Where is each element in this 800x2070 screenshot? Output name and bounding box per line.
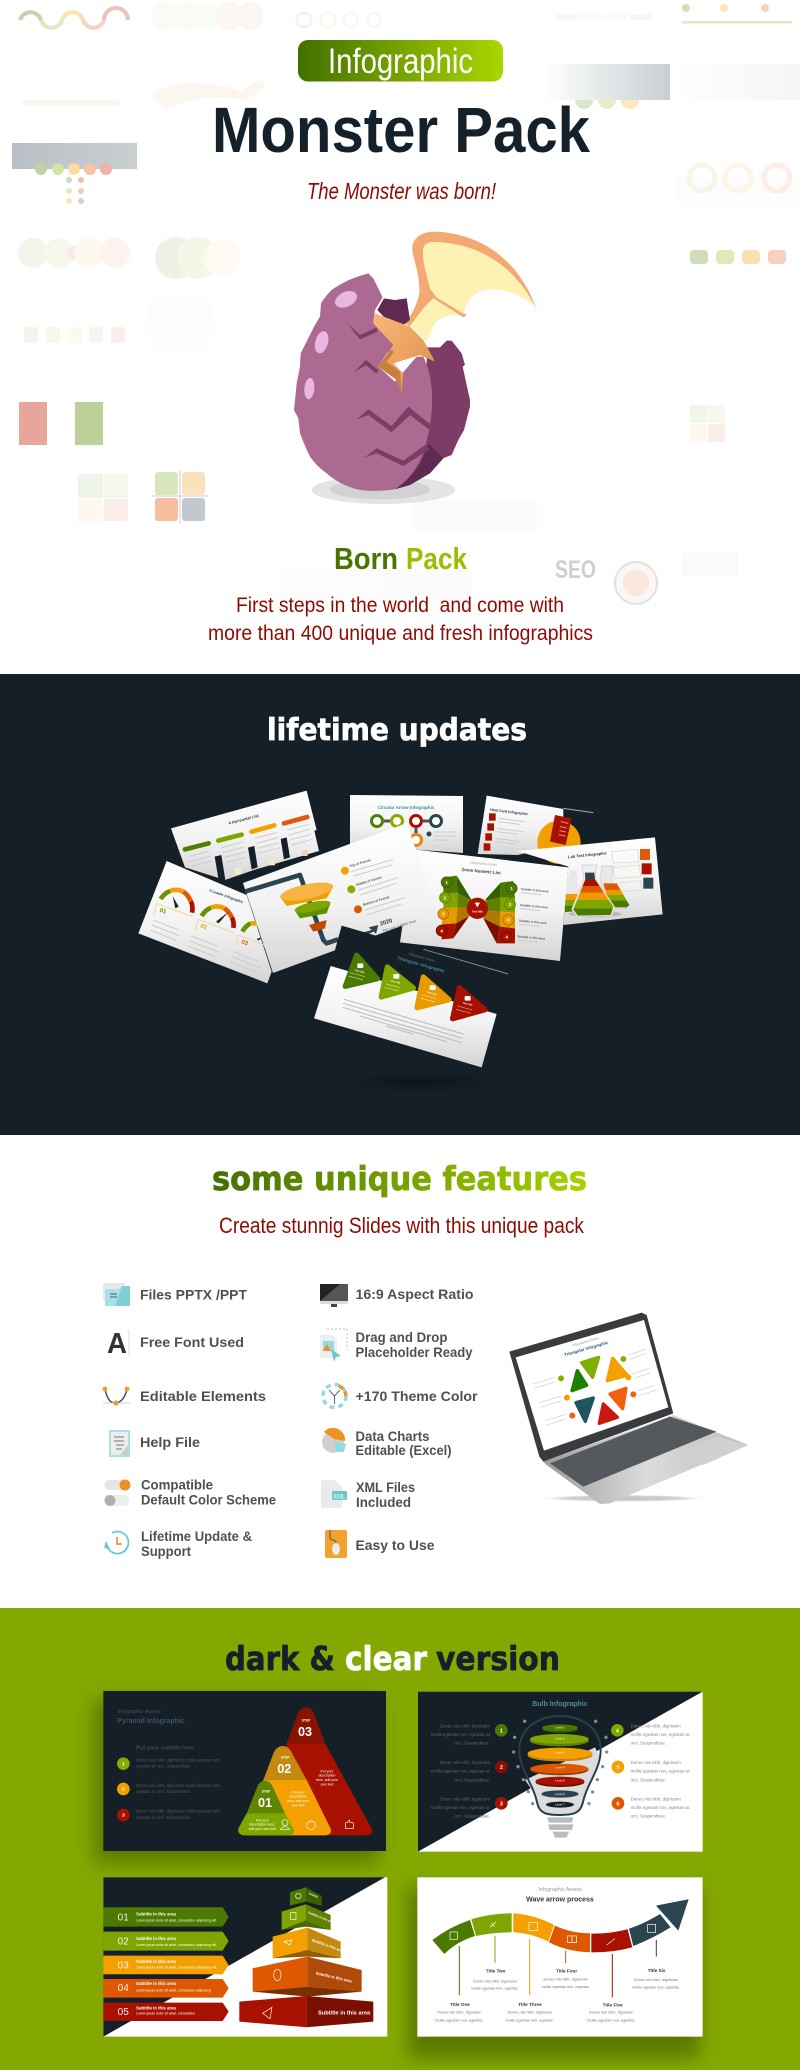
slide: Subtitle arrows pyramid: Subtitle in this area <box>136 1959 177 1964</box>
slide: Wave arrow process: Donec nisi nibh, dignissim <box>634 1978 678 1982</box>
feature: Lifetime Update and Support <box>104 1528 252 1559</box>
slide: Bulb Infographic: 5 <box>616 1765 619 1771</box>
slide: Pyramid Infographic dark: own text <box>291 1803 304 1807</box>
slide: Subtitle arrows pyramid: 02 <box>118 1937 129 1948</box>
slide: Zoom Numeric List: 2 <box>444 895 447 900</box>
slide shadows <box>94 1700 700 2058</box>
slide: Triangular Infographic: Your title <box>390 980 401 985</box>
slide: Heat Card Infographic <box>478 796 593 864</box>
illustration: hatching dragon egg <box>294 232 538 504</box>
feature: Data Charts Editable (Excel): Editable (Excel) <box>356 1442 452 1458</box>
feature: Compatible Default Color Scheme: Default Color Scheme <box>141 1492 276 1508</box>
slide: Pyramid Infographic dark: Infographic Assets <box>117 1709 161 1715</box>
slide: Triangular Infographic: Your title <box>354 969 365 974</box>
slide: Zoom Numeric List: Text title <box>472 909 483 913</box>
feature: XML Files Included: XML Files <box>356 1479 415 1495</box>
slide: Bulb Infographic: Donec nisi nibh, dignissim <box>631 1760 681 1765</box>
slide: Wave arrow process: mollis egestas non, egestas. <box>435 2018 483 2022</box>
slide: Pyramid Infographic dark: Donec nisi nibh, dignissim mollis egestas non, <box>136 1783 221 1788</box>
slide: Zoom Numeric List: 1 <box>445 880 448 885</box>
slide: Zoom Numeric List: Subtitle in this area <box>520 903 548 909</box>
feature: Files PPTX /PPT: Files PPTX /PPT <box>140 1286 247 1302</box>
feature: +170 Theme Color <box>323 1384 478 1408</box>
slide: Lab Test Infographic <box>517 837 663 925</box>
heading: Born Pack: Pack <box>406 541 468 576</box>
slide: Pyramid Infographic dark: 1 <box>122 1761 125 1767</box>
slide: Gauge Infographic <box>138 861 272 983</box>
slide: Pyramid Infographic dark: Put your subtitle here <box>136 1745 194 1751</box>
slide: Bulb Infographic: orci. Suspendisse. <box>455 1777 490 1782</box>
heading: dark & clear version <box>225 1639 560 1678</box>
slide: Wave arrow process: Donec nisi nibh, dignissim <box>437 2011 481 2015</box>
slide: Triangular Infographic: Infographic Assets <box>408 952 436 963</box>
slide: Bulb Infographic: orci. Suspendisse. <box>455 1814 490 1819</box>
feature: Drag and Drop Placeholder Ready <box>320 1329 473 1362</box>
slide: Funnel: Put your subtitle here <box>382 919 417 933</box>
slide: Triangular Infographic <box>314 926 508 1067</box>
feature: Free Font Used: A <box>107 1328 127 1360</box>
faint background slide thumbnails: SEO <box>555 556 596 584</box>
slide: Subtitle arrows pyramid: 05 <box>118 2007 129 2018</box>
slide: Zoom Numeric List: 3 <box>442 912 445 917</box>
slide: Subtitle arrows pyramid: Subtitle in this area <box>308 1911 335 1925</box>
feature: Drag and Drop Placeholder Ready: Placeholder Ready <box>356 1344 473 1360</box>
slide: Bulb Infographic: 4 <box>616 1728 619 1734</box>
slide: Pyramid Infographic dark: add your own text <box>249 1827 276 1831</box>
slide: Lab Test Infographic: Lab Test Infographic <box>568 850 608 859</box>
feature: Files PPTX /PPT <box>103 1283 247 1306</box>
heading: Born Pack <box>334 541 468 576</box>
description text: more than 400 unique and fresh infographics <box>208 622 593 645</box>
slide: Bulb Infographic: Level 1 <box>555 1726 565 1730</box>
slide: Pyramid Infographic dark: STEP <box>281 1756 290 1760</box>
slide: Zoom Numeric List: Subtitle in this area <box>519 919 547 925</box>
slide: Subtitle arrows pyramid <box>103 1877 387 2037</box>
feature: Data Charts Editable (Excel): Data Charts <box>356 1428 430 1444</box>
slide: Zoom Numeric List: 1 <box>510 886 513 891</box>
slide: Funnel <box>243 823 437 973</box>
slide: Bulb Infographic: Donec nisi nibh, dignissim <box>631 1723 681 1728</box>
slide: Wave arrow process: Title One <box>450 2002 470 2007</box>
slide: Wave arrow process: Donec nisi nibh, dignissim <box>589 2011 633 2015</box>
slide: Wave arrow process: mollis egestas non, egestas. <box>471 1987 519 1991</box>
slide: Bulb Infographic: mollis egestas non, egestas ac <box>631 1732 691 1737</box>
slide: Pyramid Infographic dark: STEP <box>302 1719 311 1723</box>
slide: Wave arrow process: Donec nisi nibh, dignissim <box>544 1977 588 1981</box>
slide: Bulb Infographic: 2 <box>500 1765 503 1771</box>
slide: Subtitle arrows pyramid: Subtitle in this area <box>136 1936 177 1941</box>
tagline: The Monster was born! <box>307 178 496 204</box>
slide: Subtitle arrows pyramid: Subtitle in this area <box>136 1912 177 1917</box>
description text <box>208 594 593 645</box>
heading: dark & clear version: version <box>436 1639 560 1678</box>
slide: Pyramid Infographic dark: 3 <box>122 1813 125 1819</box>
slide: Bulb Infographic: Level 2 <box>555 1736 565 1740</box>
slide: Pyramid Infographic dark: Donec nisi nibh, dignissim mollis egestas non, <box>136 1757 221 1762</box>
feature: Easy to Use <box>325 1530 435 1558</box>
slide: Wave arrow process: mollis egestas non, egestas. <box>505 2018 554 2022</box>
slide: Bulb Infographic: mollis egestas non, egestas ac <box>431 1805 491 1810</box>
slide: Pyramid Infographic dark: description here, <box>249 1823 275 1827</box>
slide: Pyramid Infographic dark: Put your <box>320 1769 334 1773</box>
slide: Subtitle arrows pyramid: Lorem ipsum dolor sit amet, consectetur adipiscing <box>136 1988 211 1992</box>
slide: 4 Horizontal List: 4 Horizontal List <box>228 813 260 826</box>
feature: 16:9 Aspect Ratio <box>320 1284 474 1307</box>
feature: XML Files Included: XML <box>333 1494 346 1500</box>
slide: Subtitle arrows pyramid: 03 <box>118 1960 129 1971</box>
slide: Subtitle arrows pyramid: Subtitle <box>308 1891 319 1899</box>
slide: Bulb Infographic: Donec nisi nibh, dignissim <box>440 1723 490 1728</box>
slide: Subtitle arrows pyramid: Lorem ipsum dolor sit amet, consectetur adipiscing elit. <box>136 1943 217 1947</box>
feature: Help File <box>109 1430 200 1457</box>
slide: Zoom Numeric List: 3 <box>507 918 510 923</box>
feature: Editable Elements: Editable Elements <box>140 1388 266 1404</box>
slide: Subtitle arrows pyramid: 01 <box>118 1912 129 1923</box>
slide: Wave arrow process: Title Three <box>518 2002 542 2007</box>
slide: Wave arrow process: Title Five <box>603 2002 623 2007</box>
slide: Bulb Infographic: mollis egestas non, egestas ac <box>431 1732 491 1737</box>
slide: Wave arrow process: mollis egestas non, egestas. <box>541 1985 590 1989</box>
slide: Bulb Infographic <box>418 1692 703 1852</box>
slide: Bulb Infographic: Level 5 <box>555 1779 565 1783</box>
slide: Bulb Infographic: Donec nisi nibh, dignissim <box>440 1760 490 1765</box>
slide: Pyramid Infographic dark: own text <box>320 1782 333 1786</box>
heading: some unique features: some unique features <box>212 1159 587 1198</box>
slide: Gauge Infographic: 3 Leader Infographic <box>209 888 244 904</box>
description text: First steps in the world and come with <box>236 594 564 617</box>
feature: Help File: Help File <box>140 1434 200 1450</box>
slide: Pyramid Infographic dark: egestas ac orci. Suspendisse. <box>136 1764 191 1769</box>
slide: Wave arrow process: mollis egestas non, egestas. <box>632 1986 680 1990</box>
illustration: laptop: Infographic Assets <box>572 1336 600 1347</box>
panel: dark and clear version <box>0 1608 800 2070</box>
slide: Pyramid Infographic dark: Donec nisi nibh, dignissim mollis egestas non, <box>136 1809 221 1814</box>
slide: Pyramid Infographic dark: 01 <box>258 1796 272 1810</box>
slide: Subtitle arrows pyramid: Subtitle in this area <box>315 1970 353 1984</box>
feature: Editable Elements <box>103 1387 266 1406</box>
slide: Gauge Infographic: 03 <box>240 940 249 947</box>
pill: Infographic: Infographic <box>328 42 473 81</box>
slide: Bulb Infographic: 3 <box>500 1801 503 1807</box>
slide: Zoom Numeric List: Zoom Numeric List <box>461 867 501 875</box>
slide: Pyramid Infographic dark: 03 <box>298 1725 312 1739</box>
feature: +170 Theme Color: +170 Theme Color <box>356 1388 478 1404</box>
slide: Bulb Infographic: mollis egestas non, egestas ac <box>431 1769 491 1774</box>
slide: Pyramid Infographic dark: egestas ac orci. Suspendisse. <box>136 1815 191 1820</box>
slide: Subtitle arrows pyramid: Subtitle in this area <box>136 1981 177 1986</box>
slide: Zoom Numeric List: Subtitle in this area <box>521 887 549 893</box>
feature: Easy to Use: Easy to Use <box>356 1537 435 1553</box>
slide: Funnel: Top of Funnel <box>349 858 371 868</box>
slide: Bulb Infographic: Level 7 <box>555 1803 565 1807</box>
slide: Triangular Infographic: Your title <box>462 1002 473 1007</box>
slide: Bulb Infographic: orci. Suspendisse. <box>455 1741 490 1746</box>
slide: Bulb Infographic: orci. Suspendisse. <box>631 1777 666 1782</box>
slide: Pyramid Infographic dark: description <box>319 1774 335 1778</box>
slide: Pyramid Infographic dark: 2 <box>122 1787 125 1793</box>
slide: Subtitle arrows pyramid: 04 <box>118 1983 129 1994</box>
slide: Circular Arrow Infographic: Circular Arrow Infographic <box>378 805 435 810</box>
feature: Lifetime Update and Support: Lifetime Update & <box>141 1528 252 1544</box>
slide: Zoom Numeric List: 4 <box>440 928 443 933</box>
faint background slide thumbnails <box>12 2 800 604</box>
slide: Funnel: Middle of Funnel <box>356 875 382 887</box>
feature: Compatible Default Color Scheme <box>104 1476 276 1508</box>
feature: Lifetime Update and Support: Support <box>141 1543 191 1559</box>
slide: Zoom Numeric List: 2 <box>509 902 512 907</box>
slide: Bulb Infographic: Level 6 <box>555 1792 565 1796</box>
slide: Pyramid Infographic dark: description <box>290 1795 306 1799</box>
slide: Pyramid Infographic dark: here, add your <box>287 1799 310 1803</box>
slide: Bulb Infographic: mollis egestas non, egestas ac <box>631 1805 691 1810</box>
slide: Bulb Infographic: Level 3 <box>555 1750 565 1754</box>
feature: XML Files Included <box>321 1479 415 1510</box>
slide: Bulb Infographic: mollis egestas non, egestas ac <box>631 1769 691 1774</box>
slide: Triangular Infographic: Your title <box>427 991 438 996</box>
slide: Subtitle arrows pyramid: Subtitle in this area <box>318 2011 371 2017</box>
slide: Zoom Numeric List: 4 <box>505 934 508 939</box>
slide: Bulb Infographic: 1 <box>500 1728 503 1734</box>
slide: Subtitle arrows pyramid: Subtitle in this area <box>311 1938 345 1954</box>
panel: hero <box>0 0 800 674</box>
slide: Wave arrow process: mollis egestas non, egestas. <box>587 2018 635 2022</box>
feature: XML Files Included: Included <box>356 1494 411 1510</box>
feature: Free Font Used: Free Font Used <box>140 1334 244 1350</box>
slide: Zoom Numeric List: Infographic Assets <box>470 860 497 867</box>
slide: Bulb Infographic: orci. Suspendisse. <box>631 1741 666 1746</box>
slide: Wave arrow process: Donec nisi nibh, dignissim <box>473 1979 517 1983</box>
heading: lifetime updates: lifetime updates <box>267 713 527 748</box>
panel: lifetime updates <box>0 674 800 1135</box>
slide: Pyramid Infographic dark: Put your <box>291 1790 305 1794</box>
slide: Funnel: Bottom of Funnel <box>362 895 390 907</box>
slide: Subtitle arrows pyramid: Subtitle in this area <box>136 2006 177 2011</box>
feature: Free Font Used <box>107 1328 244 1360</box>
slide: Wave arrow process: Title Four <box>556 1968 577 1973</box>
illustration: laptop <box>509 1313 748 1504</box>
slide: Triangular Infographic: Triangular Infographic <box>397 955 446 974</box>
slide: Pyramid Infographic dark: 02 <box>277 1762 291 1776</box>
slide: Funnel: 2020 <box>379 918 393 928</box>
subheading: Create stunnig Slides with this unique pack <box>219 1213 585 1238</box>
slide: Bulb Infographic: Donec nisi nibh, dignissim <box>440 1796 490 1801</box>
slide: Pyramid Infographic dark: Pyramid Infographic <box>117 1718 185 1725</box>
slide: Bulb Infographic: 6 <box>616 1801 619 1807</box>
slide: Pyramid Infographic dark <box>103 1691 386 1851</box>
slide: Circular Arrow Infographic <box>350 795 463 853</box>
slide: Pyramid Infographic dark: here, add your <box>316 1778 339 1782</box>
slide: Heat Card Infographic: Heat Card Infographic <box>490 808 528 816</box>
slide: Zoom Numeric List <box>400 849 568 961</box>
slide: Pyramid Infographic dark: egestas ac orci. Suspendisse. <box>136 1789 191 1794</box>
heading: dark & clear version: dark & <box>225 1639 335 1678</box>
slide: Wave arrow process: Title Six <box>648 1968 666 1973</box>
panel: unique features <box>0 1135 800 1608</box>
slide collage <box>138 791 663 1096</box>
feature: Drag and Drop Placeholder Ready: Drag and Drop <box>356 1329 448 1345</box>
slide: Wave arrow process <box>417 1877 703 2037</box>
heading: Born Pack: Born <box>334 541 398 576</box>
slide: Subtitle arrows pyramid: Lorem ipsum dolor sit amet, consectetur adipiscing elit. <box>136 1966 217 1970</box>
slide: Wave arrow process: Donec nisi nibh, dignissim <box>508 2011 552 2015</box>
slide: Gauge Infographic: 01 <box>159 908 168 916</box>
slide: Bulb Infographic: Donec nisi nibh, dignissim <box>631 1796 681 1801</box>
slide: Zoom Numeric List: Subtitle in this area <box>517 934 545 941</box>
slide: Wave arrow process: Infographic Assets <box>538 1887 582 1893</box>
feature: 16:9 Aspect Ratio: 16:9 Aspect Ratio <box>356 1286 474 1302</box>
slide: Gauge Infographic: 02 <box>199 924 208 931</box>
title: Monster Pack: Monster Pack <box>212 94 590 166</box>
slide: 4 Horizontal List <box>171 791 319 880</box>
slide: Bulb Infographic: Level 4 <box>555 1766 565 1770</box>
heading: dark & clear version: clear <box>345 1639 428 1678</box>
slide: Subtitle arrows pyramid: Lorem ipsum dolor sit amet, consectetur adipiscing elit. <box>136 1919 217 1923</box>
slide: Subtitle arrows pyramid: Lorem ipsum dolor sit amet, consectetur <box>136 2012 196 2016</box>
slide: Pyramid Infographic dark: Put your <box>256 1818 270 1822</box>
slide: Bulb Infographic: orci. Suspendisse. <box>631 1814 666 1819</box>
slide: Wave arrow process: Title Two <box>486 1968 506 1973</box>
slide: Wave arrow process: Wave arrow process <box>526 1896 594 1903</box>
feature: Data Charts Editable (Excel) <box>322 1428 452 1458</box>
illustration: laptop: Triangular Infographic <box>564 1340 609 1357</box>
feature: Compatible Default Color Scheme: Compatible <box>141 1476 213 1492</box>
slide: Bulb Infographic: Bulb Infographic <box>532 1701 588 1708</box>
slide: Pyramid Infographic dark: STEP <box>262 1789 271 1793</box>
